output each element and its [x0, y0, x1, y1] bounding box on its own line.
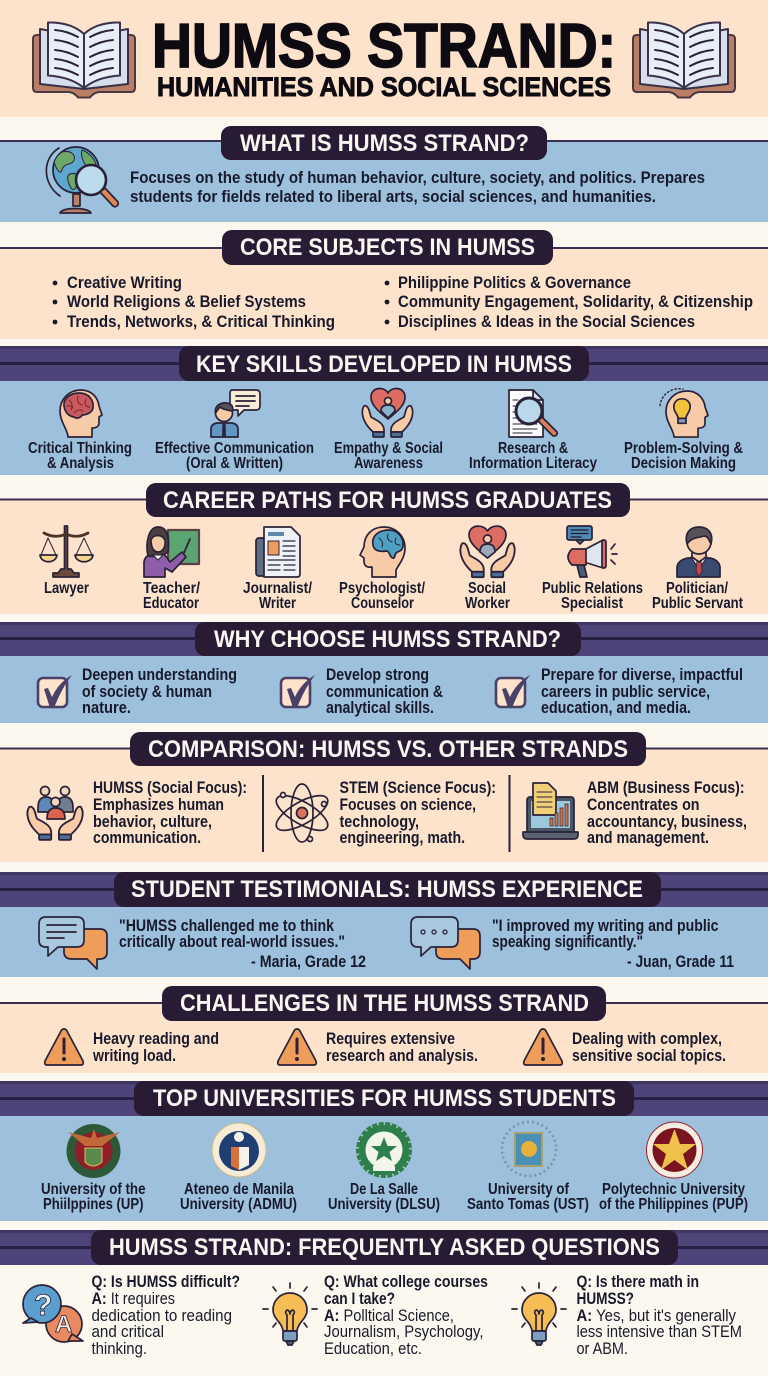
panel: faq — [0, 1230, 768, 1358]
panel: universities — [0, 1081, 768, 1221]
panel: what is humss — [0, 126, 768, 222]
faq 2: Journalism, Psychology, — [324, 1322, 484, 1341]
labels: skills: Research & — [498, 440, 568, 457]
icon: problem solving head — [660, 389, 708, 437]
panel: challenges — [0, 986, 768, 1073]
labels: skills: (Oral & Written) — [186, 455, 283, 472]
reason 3: careers in public service, — [541, 682, 710, 701]
reason 1 — [38, 665, 237, 717]
icon: empathy heart hands — [362, 388, 413, 437]
text: definition: Focuses on the study of human behavior, culture, society, and politics. Prepares — [130, 168, 705, 187]
icon: megaphone — [567, 526, 617, 577]
labels: skills — [28, 440, 743, 472]
labels: universities: University of — [488, 1181, 570, 1198]
labels: careers: Journalist/ — [243, 580, 312, 597]
faq 3: less intensive than STEM — [576, 1322, 742, 1341]
labels: careers: Politician/ — [666, 580, 728, 597]
faq 2: Education, etc. — [324, 1339, 422, 1358]
labels: universities — [41, 1181, 748, 1213]
icon: globe with magnifier — [46, 147, 118, 213]
labels: skills: Empathy & Social — [334, 440, 443, 457]
labels: skills: & Analysis — [47, 455, 114, 472]
faq 3: HUMSS? — [576, 1289, 634, 1308]
faq 1: thinking. — [92, 1339, 147, 1358]
challenge 2: research and analysis. — [326, 1046, 478, 1065]
comparison: humss: behavior, culture, — [93, 812, 212, 831]
challenge 2: Requires extensive — [326, 1029, 455, 1048]
labels: universities: University of the — [41, 1181, 146, 1198]
comparison: abm: and management. — [587, 828, 709, 847]
labels: careers: Lawyer — [44, 580, 89, 597]
panel: testimonials — [0, 872, 768, 977]
challenge 3 — [524, 1029, 726, 1065]
text: definition — [130, 168, 705, 206]
faq 2 — [263, 1272, 488, 1358]
panel: key skills — [0, 346, 768, 475]
faq 1: dedication to reading — [92, 1306, 232, 1325]
reason 3: education, and media. — [541, 698, 691, 717]
comparison: stem: Focuses on science, — [340, 795, 476, 814]
testimonial: maria: "HUMSS challenged me to think — [119, 916, 334, 935]
header banner — [0, 0, 768, 117]
dividers — [263, 775, 510, 852]
comparison: humss: HUMSS (Social Focus): — [93, 778, 247, 797]
panel: comparison — [0, 732, 768, 862]
panel: core subjects — [0, 230, 768, 339]
heading: comparison: COMPARISON: HUMSS VS. OTHER STRANDS — [148, 736, 628, 763]
challenge 1: Heavy reading and — [93, 1029, 219, 1048]
seal: UST — [502, 1122, 556, 1176]
seal: UP — [66, 1124, 120, 1178]
faq 1: and critical — [92, 1322, 164, 1341]
list: left subjects: Trends, Networks, & Critical Thinking — [67, 312, 335, 331]
icon: research — [509, 390, 557, 437]
labels: skills: Effective Communication — [155, 440, 314, 457]
list: right subjects: Philippine Politics & Governance — [398, 273, 631, 292]
faq 3: Q: Is there math in — [576, 1272, 699, 1291]
labels: careers: Specialist — [561, 595, 624, 612]
labels: careers: Social — [468, 580, 506, 597]
comparison: stem — [271, 778, 496, 847]
challenge 3: Dealing with complex, — [572, 1029, 722, 1048]
labels: universities: University (DLSU) — [328, 1196, 440, 1213]
icon: politician — [677, 527, 720, 577]
faq 1: A: It requires — [92, 1289, 175, 1308]
heading: testimonials: STUDENT TESTIMONIALS: HUMSS EXPERIENCE — [131, 876, 643, 903]
heading: faq: HUMSS STRAND: FREQUENTLY ASKED QUESTIONS — [109, 1234, 660, 1261]
testimonial: maria — [39, 916, 366, 971]
labels: careers: Public Relations — [542, 580, 643, 597]
comparison: stem: STEM (Science Focus): — [340, 778, 496, 797]
text: definition: students for fields related to liberal arts, social sciences, and humanities. — [130, 187, 656, 206]
heading: core subjects: CORE SUBJECTS IN HUMSS — [240, 234, 535, 261]
labels: skills: Critical Thinking — [28, 440, 132, 457]
icon: scales — [40, 526, 93, 577]
comparison: humss — [27, 778, 247, 847]
comparison: abm: Concentrates on — [587, 795, 700, 814]
subtitle: HUMANITIES AND SOCIAL SCIENCES — [157, 72, 611, 102]
labels: careers — [44, 580, 744, 612]
list: left subjects: Creative Writing — [67, 273, 182, 292]
list: left subjects — [53, 273, 335, 331]
challenge 1: writing load. — [92, 1046, 176, 1065]
faq 3: or ABM. — [576, 1339, 628, 1358]
seal: ADMU — [212, 1123, 266, 1177]
list: left subjects: World Religions & Belief Systems — [67, 292, 306, 311]
faq 1: Q: Is HUMSS difficult? — [92, 1272, 240, 1291]
faq 2: Q: What college courses — [324, 1272, 488, 1291]
reason 2: communication & — [326, 682, 443, 701]
icon: psychologist head — [360, 527, 405, 577]
testimonial: juan — [411, 916, 734, 971]
seal: PUP — [646, 1122, 702, 1178]
labels: careers: Psychologist/ — [339, 580, 425, 597]
labels: universities: De La Salle — [350, 1181, 418, 1198]
title: HUMSS STRAND: — [152, 12, 616, 81]
heading: career paths: CAREER PATHS FOR HUMSS GRADUATES — [163, 487, 612, 514]
challenge 3: sensitive social topics. — [572, 1046, 726, 1065]
reason 1: nature. — [82, 698, 131, 717]
challenge 2 — [278, 1029, 478, 1065]
icon: social worker — [460, 526, 515, 577]
labels: universities: Phiilppines (UP) — [43, 1196, 144, 1213]
labels: careers: Worker — [465, 595, 510, 612]
faq 3 — [512, 1272, 742, 1358]
heading: universities: TOP UNIVERSITIES FOR HUMSS STUDENTS — [153, 1085, 616, 1112]
icon: brain head — [60, 390, 102, 437]
list: right subjects — [385, 273, 753, 331]
faq 1 — [23, 1272, 240, 1358]
heading: key skills: KEY SKILLS DEVELOPED IN HUMSS — [196, 351, 572, 378]
seal: DLSU — [358, 1124, 410, 1176]
labels: skills: Awareness — [354, 455, 423, 472]
panel: career paths — [0, 483, 768, 614]
heading: what is humss: WHAT IS HUMSS STRAND? — [240, 130, 529, 157]
labels: careers: Educator — [143, 595, 199, 612]
testimonial: juan: "I improved my writing and public — [492, 916, 718, 935]
testimonial: maria: critically about real-world issues." — [119, 932, 345, 951]
faq 2: can I take? — [324, 1289, 395, 1308]
labels: careers: Counselor — [351, 595, 414, 612]
testimonial: juan: speaking significantly." — [492, 932, 643, 951]
challenge 1 — [45, 1029, 219, 1065]
labels: universities: University (ADMU) — [180, 1196, 297, 1213]
icon: open book right — [633, 22, 735, 98]
faq 1: ? — [34, 1289, 52, 1322]
icon: communication — [211, 390, 260, 437]
heading: challenges: CHALLENGES IN THE HUMSS STRAND — [180, 990, 589, 1017]
comparison: stem: engineering, math. — [340, 828, 465, 847]
icon: open book left — [33, 22, 135, 98]
labels: skills: Decision Making — [631, 455, 736, 472]
reason 2: analytical skills. — [326, 698, 434, 717]
labels: universities: Ateneo de Manila — [184, 1181, 294, 1198]
icon: newspaper — [256, 527, 300, 577]
labels: skills: Problem-Solving & — [624, 440, 743, 457]
reason 3 — [496, 665, 743, 717]
comparison: humss: Emphasizes human — [93, 795, 224, 814]
reason 1: Deepen understanding — [82, 665, 237, 684]
testimonial: maria: - Maria, Grade 12 — [251, 952, 366, 971]
panel: why choose — [0, 622, 768, 723]
testimonial: juan: - Juan, Grade 11 — [627, 952, 734, 971]
labels: careers: Teacher/ — [143, 580, 200, 597]
comparison: stem: technology, — [340, 812, 419, 831]
list: right subjects: Disciplines & Ideas in the Social Sciences — [398, 312, 695, 331]
icon: teacher — [144, 527, 199, 577]
labels: careers: Writer — [259, 595, 296, 612]
comparison: humss: communication. — [93, 828, 201, 847]
reason 2 — [281, 665, 443, 717]
faq 3: A: Yes, but it's generally — [576, 1306, 736, 1325]
faq 2: A: Polltical Science, — [324, 1306, 454, 1325]
comparison: abm — [523, 778, 747, 847]
labels: skills: Information Literacy — [469, 455, 597, 472]
faq 1: A — [55, 1311, 72, 1338]
reason 2: Develop strong — [326, 665, 429, 684]
reason 1: of society & human — [82, 682, 212, 701]
labels: universities: Santo Tomas (UST) — [467, 1196, 589, 1213]
labels: careers: Public Servant — [652, 595, 744, 612]
heading: why choose: WHY CHOOSE HUMSS STRAND? — [214, 626, 561, 653]
